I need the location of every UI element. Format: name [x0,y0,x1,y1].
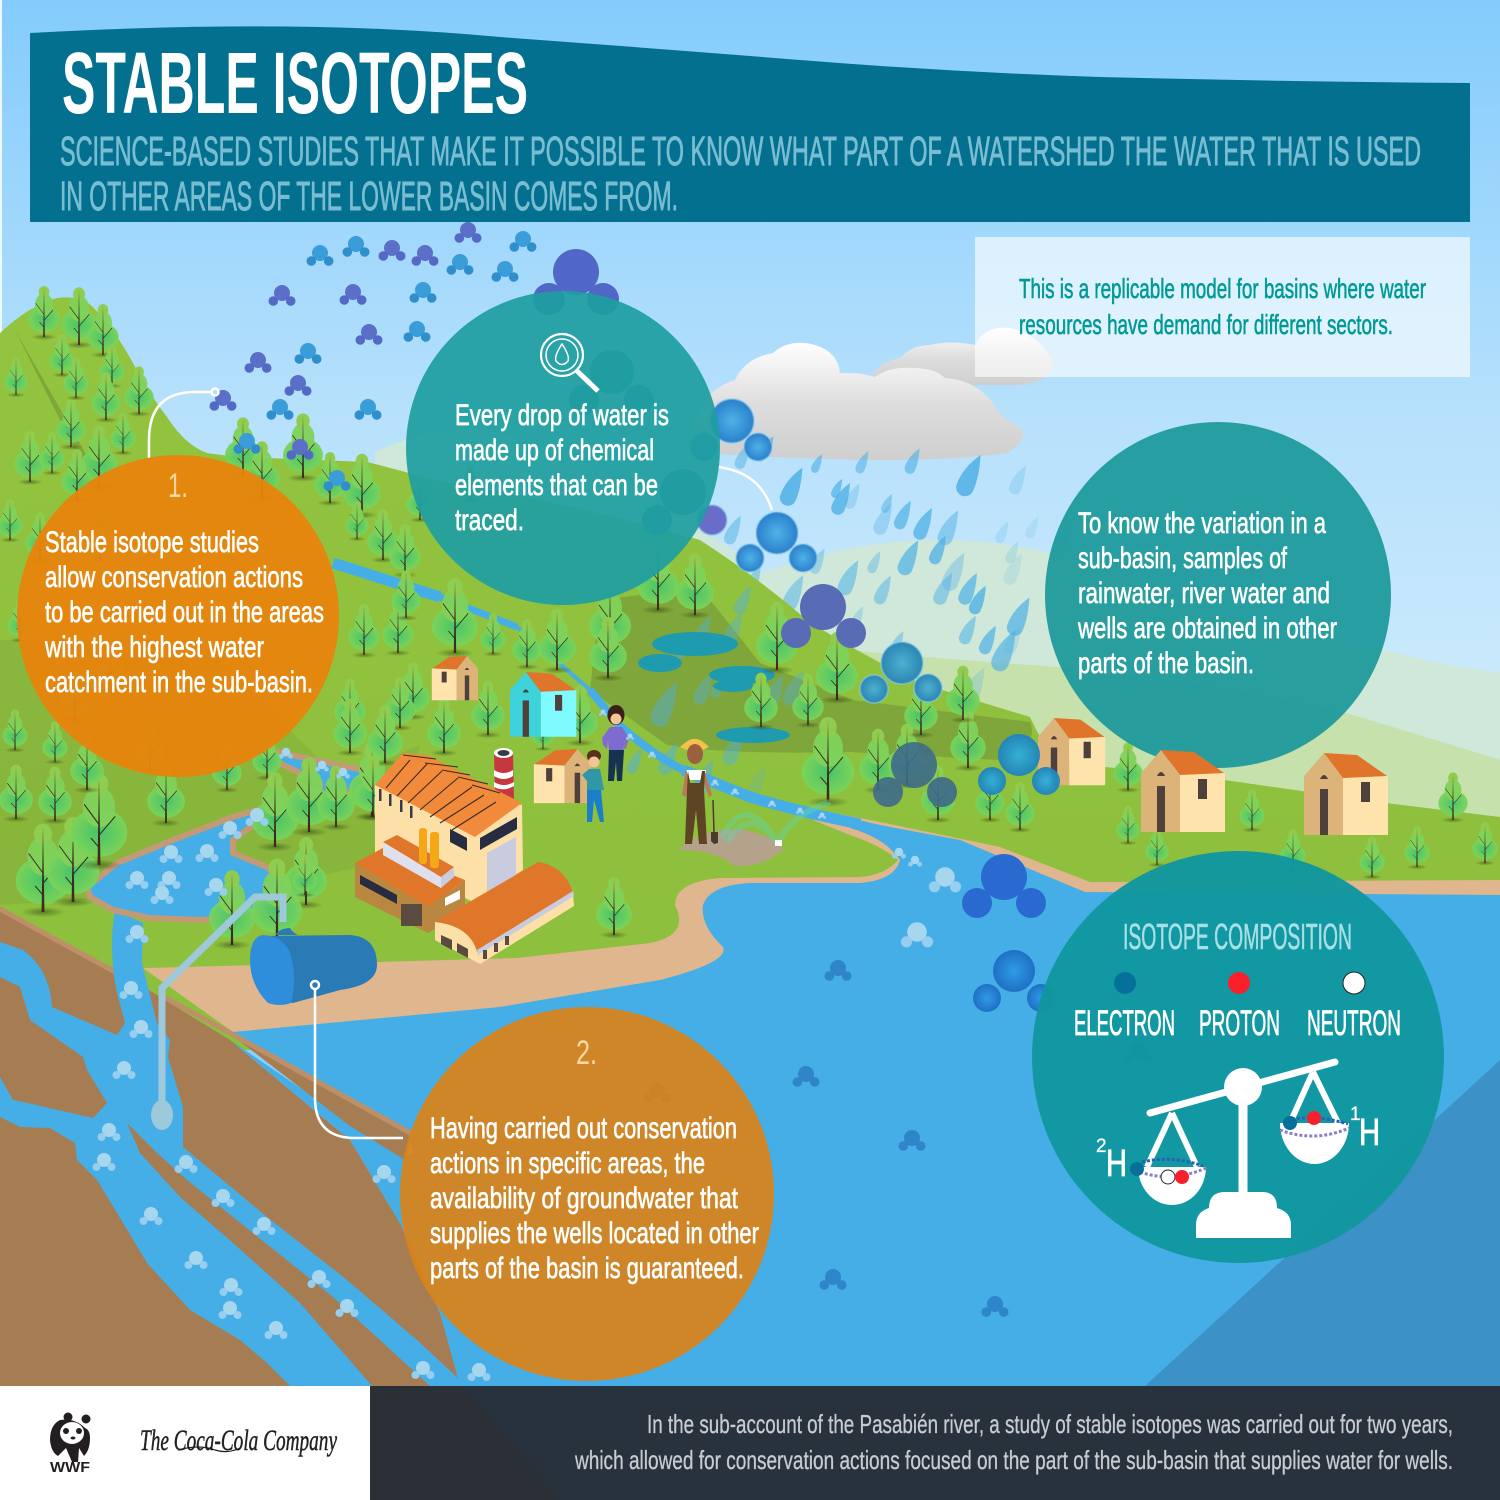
tank [275,928,298,935]
molecule: in rain [697,505,817,572]
step 2 text: availability of groundwater that [430,1182,739,1215]
step 2 text: parts of the basin is guaranteed. [430,1252,744,1285]
molecule: dark [873,742,957,807]
step 1 text [44,526,324,699]
callout line: step 2 [311,981,403,1138]
boy [582,750,604,822]
underground cross section [0,907,560,1500]
underground water channels [0,910,460,1386]
header banner [30,26,1470,222]
orange panel 1 [17,455,339,777]
logo: The Coca-Cola Company: The Coca-Cola Company [140,1424,337,1457]
house: right 1 [1038,718,1105,785]
house: right 3 [1304,753,1388,835]
logo panel [0,1386,370,1500]
ponds on hillside [638,632,790,743]
rain drops [714,436,1071,706]
text: elements that can be [455,469,658,502]
house: teal [510,672,576,737]
teal panel: sub-basin samples [1045,422,1391,768]
house: small left [432,656,478,700]
forest trees [0,286,1498,949]
isotope labels: H [1359,1112,1380,1154]
back cloud [872,328,1053,385]
text: traced. [455,504,524,537]
molecule: at cloud [690,399,772,461]
footer bar [370,1386,1500,1500]
isotope labels: 2 [1096,1136,1107,1157]
house: right 2 in front of teal panel [1141,750,1225,832]
text [455,399,669,537]
sand shoreline [143,812,1500,1040]
small water molecules in air [210,222,536,491]
replicable model note [975,237,1470,377]
rain cloud [698,343,1023,460]
step 1 text: to be carried out in the areas [45,596,324,629]
atom orbit: protium [1280,1118,1349,1136]
molecule: behind teal circle [569,350,706,535]
molecule: bright blue [962,854,1046,918]
step 1 text: allow conservation actions [45,561,303,594]
step 1 text: Stable isotope studies [45,526,259,559]
teal panel: sub-basin samples: rainwater, river water and [1078,577,1330,610]
molecules in surface and ground water [92,710,1152,1381]
teal panel: isotope composition [1032,851,1444,1263]
step 2 text: supplies the wells located in other [430,1217,759,1250]
subtitle: IN OTHER AREAS OF THE LOWER BASIN COMES FROM. [60,173,678,219]
logo: WWF panda [50,1412,90,1476]
lake shadow band [1145,1060,1500,1386]
step number 1: 1. [168,467,188,505]
teal panel: every drop [406,291,720,605]
legend [1074,972,1401,1043]
molecule: slate [781,584,866,648]
step number 2: 2. [576,1034,597,1072]
molecule: near house [978,734,1060,795]
title: STABLE ISOTOPES [62,35,528,132]
orange panel 2 [400,1007,774,1381]
step 2 text [430,1112,759,1285]
isotope labels: H [1106,1143,1127,1185]
molecule: lake [973,950,1055,1012]
legend: NEUTRON [1307,1004,1401,1043]
isotope labels [1096,1104,1380,1185]
step 1 text: with the highest water [44,631,264,664]
people [582,705,830,866]
teal panel: sub-basin samples: wells are obtained in other [1077,612,1337,645]
farmer [680,739,718,844]
water tank and pipe [151,897,377,1130]
pipe [162,897,283,1110]
sky background [0,0,1500,1000]
step 2 text: actions in specific areas, the [430,1147,705,1180]
lower wing [355,848,465,907]
logo: The Coca-Cola Company [140,1424,337,1457]
rain drops over hillside [627,586,803,795]
houses [432,656,1388,835]
text: made up of chemical [455,434,654,467]
legend: ELECTRON [1074,1004,1175,1043]
river [333,563,860,824]
step 2 text: Having carried out conservation [430,1112,737,1145]
step 1 text: catchment in the sub-basin. [45,666,313,699]
molecule: above teal circle [533,249,619,315]
icon: magnifier with drop [541,334,598,391]
isotope labels: 1 [1350,1104,1361,1125]
subtitle [60,128,1421,219]
barrel hangar [435,862,573,952]
teal panel: sub-basin samples: parts of the basin. [1078,647,1254,680]
logo: WWF panda: WWF [50,1459,90,1476]
soil patch with sprinkler [680,802,830,866]
legend: PROTON [1199,1004,1280,1043]
darker hill shading [0,330,1032,905]
footer text [574,1409,1453,1475]
text: Every drop of water is [455,399,669,432]
house: small centre [534,749,591,803]
teal panel: sub-basin samples: sub-basin, samples of [1078,542,1287,575]
main green hillside [0,297,1500,1050]
atom orbit: deuterium [1140,1159,1206,1177]
woman [602,705,629,781]
distant hills [375,430,1500,900]
lake [233,818,1500,1500]
pond with winding stream [87,750,363,920]
balance scale [1130,1062,1349,1238]
large water molecules [533,249,1060,1012]
teal panel: sub-basin samples: To know the variation in a [1078,507,1326,540]
molecule: teal blue [860,642,942,703]
factory [355,748,574,964]
callout line: water drop to molecule [718,467,772,510]
callout line: step 1 [149,388,218,458]
